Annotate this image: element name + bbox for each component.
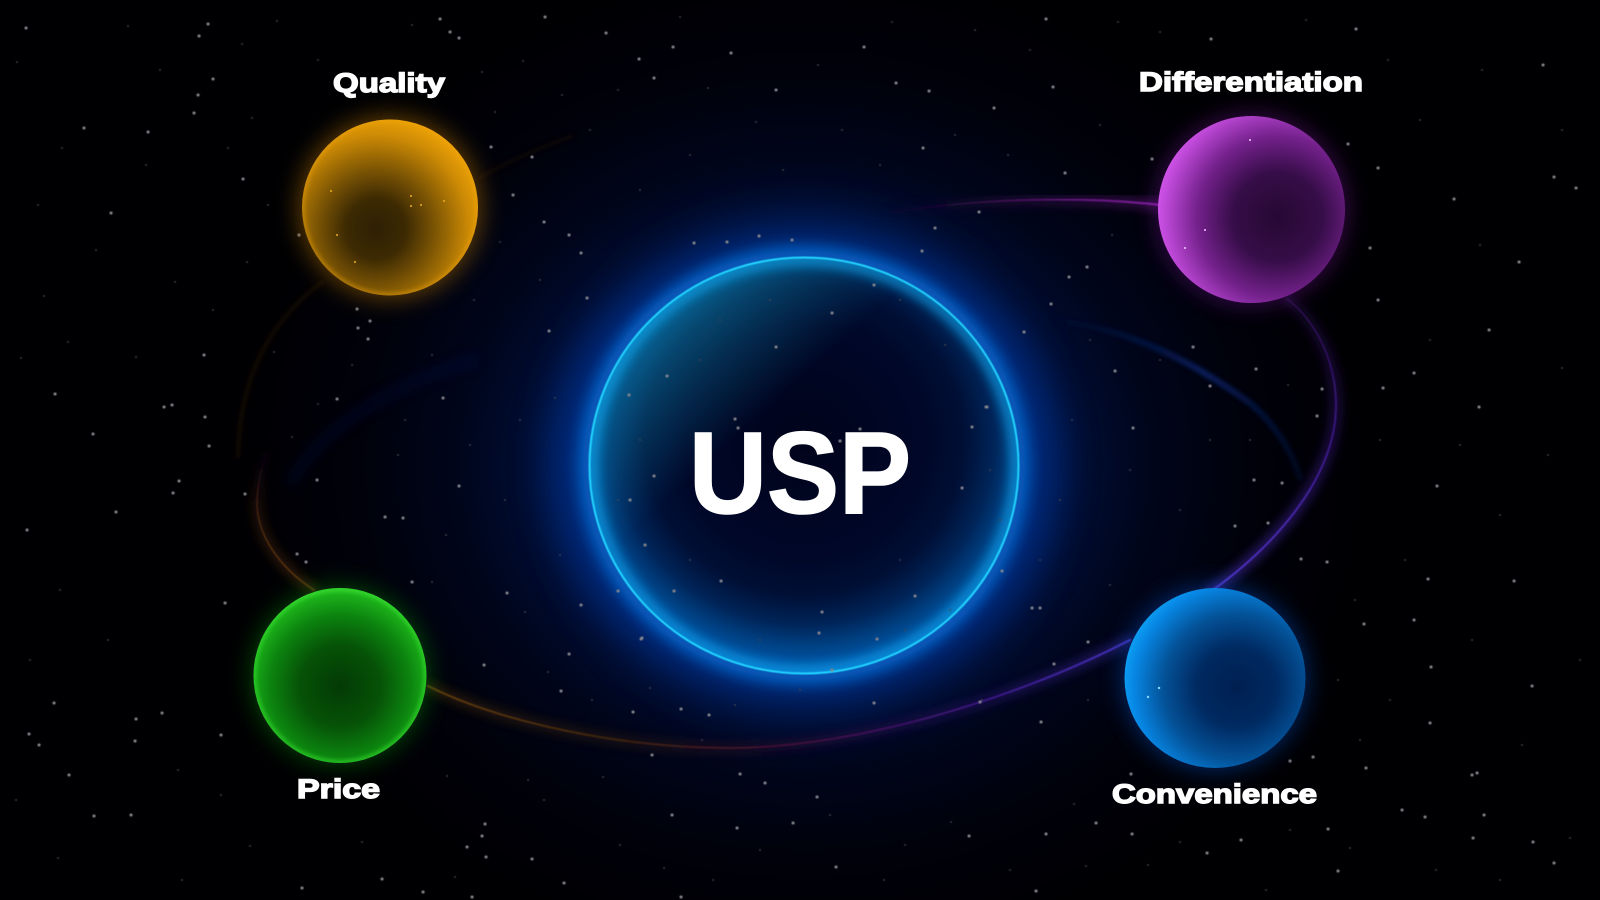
- planet: Convenience (blue): [1123, 586, 1307, 770]
- orbit: inner blue arc right: [1060, 321, 1300, 478]
- planet: Price (green): [251, 586, 429, 766]
- planet: Differentiation (magenta): [1158, 116, 1346, 304]
- central USP sphere: [580, 248, 1028, 682]
- planet: Quality (orange): [299, 116, 481, 298]
- orbit: top arc left of Differentiation: [887, 200, 1160, 213]
- orbit: faint arc below Quality: [238, 282, 322, 456]
- orbit rings: [238, 136, 1336, 748]
- orbit: bottom arc from Price to Convenience: [428, 640, 1130, 748]
- label: Quality: Quality: [333, 68, 445, 98]
- orbit: inner blue arc left: [293, 361, 473, 480]
- label: Differentiation: Differentiation: [1139, 67, 1363, 97]
- orbit: right arc from Convenience to Differentiation: [1210, 299, 1336, 592]
- orbit: faint line right of Quality: [480, 136, 572, 178]
- label: Price: Price: [297, 774, 380, 804]
- orbit: arc above Price: [257, 455, 314, 590]
- label: Convenience: Convenience: [1112, 779, 1317, 809]
- center title: USP: USP: [689, 408, 911, 538]
